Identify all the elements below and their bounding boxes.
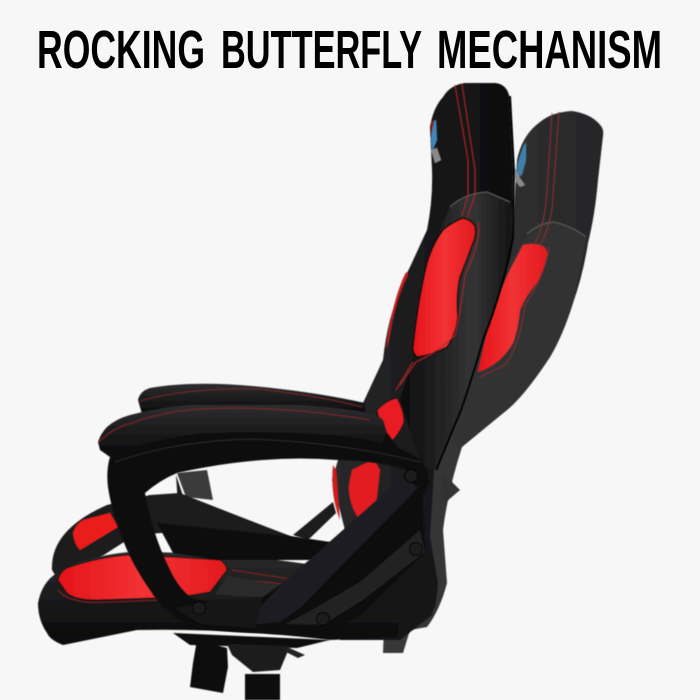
rivet xyxy=(192,602,206,614)
rear seat xyxy=(52,493,345,583)
rear ghost stitching xyxy=(480,112,559,377)
rear ghost backrest xyxy=(383,111,603,653)
frame rivets xyxy=(192,470,422,626)
rear arm support xyxy=(177,470,213,500)
red lumbar panel xyxy=(413,218,476,357)
rear ghost logo xyxy=(516,142,526,178)
rear pivot cover xyxy=(440,473,460,507)
seat right panel xyxy=(215,576,300,598)
illustration: reclined chair, rear ghost position xyxy=(383,111,603,653)
red seat panel xyxy=(58,555,227,600)
backrest seam xyxy=(450,192,510,207)
stitching xyxy=(396,84,479,390)
illustration: base and gas lift xyxy=(173,633,330,700)
backrest outer shape xyxy=(332,83,513,613)
backrest lower panel xyxy=(400,192,512,470)
rear ghost red panel xyxy=(478,244,547,372)
armrest stitching xyxy=(99,408,370,442)
lower red panel xyxy=(377,398,404,446)
title: ROCKING xyxy=(37,20,205,80)
frame highlight xyxy=(115,439,420,462)
rivet xyxy=(404,470,418,482)
inner red panel xyxy=(349,462,380,523)
illustration: front armrest and frame xyxy=(98,405,429,634)
tilt lever xyxy=(286,647,305,658)
seat mount plate xyxy=(173,633,330,648)
title: BUTTERFLY xyxy=(221,20,422,80)
rear ghost back lower panel xyxy=(452,221,587,447)
rivet xyxy=(316,612,330,626)
rear cross bar xyxy=(293,502,336,540)
backrest rear shadow edge xyxy=(436,96,514,470)
brand logo xyxy=(431,120,441,163)
front armrest pad xyxy=(98,405,387,457)
rear seat red panel xyxy=(73,513,118,550)
seat mid bolster xyxy=(157,523,337,560)
rear ghost seam xyxy=(527,222,586,237)
illustration: front backrest xyxy=(332,83,514,613)
armrest frame xyxy=(107,432,429,634)
seat rear filler xyxy=(340,540,437,640)
frame lower strut xyxy=(285,530,425,625)
frame bottom panel xyxy=(175,597,263,628)
title xyxy=(37,20,662,80)
tilt knob xyxy=(190,640,228,693)
red side bolster sliver xyxy=(386,272,408,350)
tilt mechanism xyxy=(227,644,290,672)
rear armrest pad xyxy=(138,384,365,414)
frame diagonal strut xyxy=(250,476,418,625)
illustration: rear ghost armrest and seat xyxy=(52,384,460,583)
gas lift column xyxy=(245,674,280,700)
armrest underside filler xyxy=(110,425,400,462)
illustration: front seat cushion xyxy=(38,523,437,645)
seat stitching xyxy=(58,570,345,602)
seat base shape xyxy=(38,552,400,645)
rivet xyxy=(410,542,422,556)
